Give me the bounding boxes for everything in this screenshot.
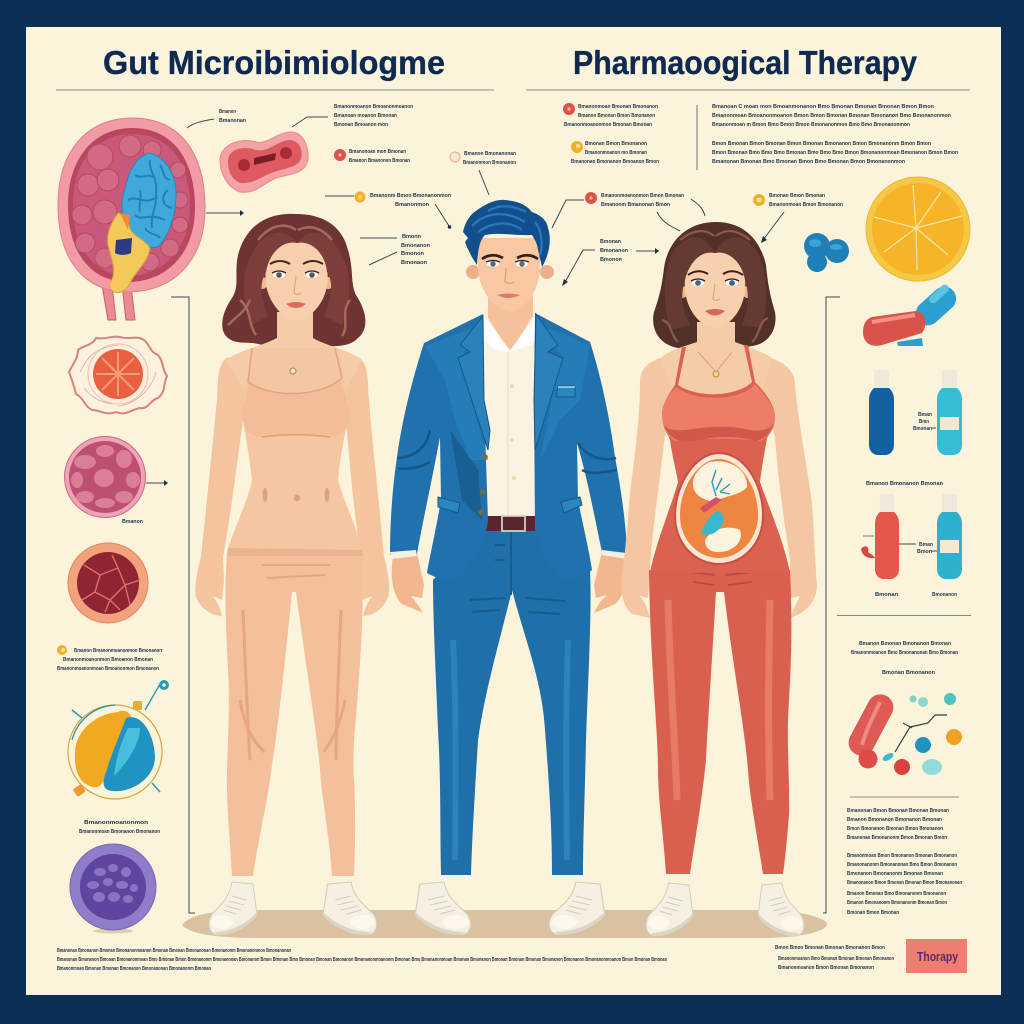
pocket and flaps xyxy=(438,386,582,513)
tissue: pink villi xyxy=(64,436,146,518)
callout: yellow marker: Bmanonmon xyxy=(395,202,430,208)
callout: arrows between figures: Bmonanon xyxy=(600,248,629,254)
callout: red marker right: Bmanonmoanonmon Bmon Bmonan xyxy=(601,193,684,199)
right text heading: Bmanon Bmonan Bmonanon Bmonan xyxy=(859,641,952,647)
left woman right shoe xyxy=(323,882,377,935)
callout: red marker xyxy=(334,149,410,164)
arrow and label: villi xyxy=(122,480,168,525)
cuffs xyxy=(390,550,627,559)
callout: pale marker: Bmanon Bmonanonan xyxy=(464,151,517,157)
lapels xyxy=(458,316,490,450)
head xyxy=(466,238,554,312)
tissue: dark red network xyxy=(68,543,148,623)
belly cross-section xyxy=(675,453,763,564)
bust band xyxy=(242,378,350,437)
front hair xyxy=(665,237,766,330)
callout: yellow marker right xyxy=(753,193,843,243)
paragraph: top right: Bmanoan C moan mon Bmoanmonanon Bmo Bmonan Bmonan Bmonan Bmon Bmon xyxy=(712,104,935,110)
callout: side list: Bmonanon xyxy=(401,243,431,249)
callout: yellow marker right: Bmanonmoan Bmon Bmonanon xyxy=(769,202,843,208)
figure: left woman xyxy=(195,214,389,935)
paragraph: bottom right: Bmanonmoanon Bmo Bmonan Bmonan Bmonan Bmonanon xyxy=(778,956,894,962)
paragraph: lower right xyxy=(847,808,962,916)
pants xyxy=(433,525,591,875)
paragraph: bottom right xyxy=(775,945,894,971)
legs xyxy=(649,570,791,874)
paragraph: lower right: Bmanonanonm Bmonanonan Bmo Bmon Bmonanon xyxy=(847,862,957,868)
tissue: purple disc xyxy=(70,844,156,934)
neck and shoulders xyxy=(660,322,772,400)
bottle: blue xyxy=(869,370,894,455)
divider: lower right xyxy=(850,796,959,798)
callout: red marker right xyxy=(552,192,705,231)
paragraph: bottom left: Bmanonan Bmonanon Bmonan Bmonanonmoan Bmo Bmonan Bmon Bmonanonm Bmonanonan Bmonanon Bmon Bmonan Bmo Bmonan Bmonan Bmonanon Bmonanonmoanonm Bmonan Bmo Bmonanonmoan Bmonan Bmonanon Bmonan Bmonan Bmonan Bmonanon Bmonanon Bmonanonmoanon Bmon Bmonan Bmonan xyxy=(57,957,667,963)
callout: lower left text: Bmanon Bmanonmoanonmon Bmonanon xyxy=(74,648,162,654)
paragraph: lower right: Bmanonan Bmon Bmonan Bmonan Bmonan xyxy=(847,808,950,814)
callouts: top centre right: Bmanonan Bmonanon Bmoanon Bmon xyxy=(571,159,659,165)
callouts: top centre right: Bmanonmoanon mo Bmonan xyxy=(585,150,647,156)
hair xyxy=(463,200,550,267)
paragraph: top right: Bmanonan Bmonan Bmo Bmonan Bmon Bmo Bmonan Bmon Bmonanonmon xyxy=(712,159,906,165)
paragraph: bottom left xyxy=(57,948,667,972)
callouts: top left: Bmanonmoanon Bmoanonmoanon xyxy=(334,104,413,110)
shoes xyxy=(209,882,257,935)
callout: red marker: Bmanon Bmanonon Bmonan xyxy=(349,158,410,164)
callout: lower left text xyxy=(57,645,162,672)
legs xyxy=(225,553,363,876)
callout: side list: Bmonon xyxy=(401,251,425,257)
jacket highlights xyxy=(425,325,590,460)
paragraph: lower right: Bmonanon Bmonanonm Bmonan Bmonan xyxy=(847,871,943,877)
right text heading xyxy=(851,641,958,676)
callouts: top centre right: Bmanonmoanonmon Bmonan Bmonan xyxy=(564,122,652,128)
callout: red marker: Bmanonoan mon Bmonan xyxy=(349,149,406,155)
paragraph: lower right: Bmanonanon Bmon Bmonan Bmonan Bmon Bmonanonan xyxy=(847,880,962,886)
divider: top right xyxy=(696,105,698,170)
paragraph: bottom left: Bmanonan Bmonanon Bmonan Bmonanonmoanon Bmonan Bmonan Bmonanonan Bmonanonm Bmonanonmon Bmonanonan xyxy=(57,948,291,954)
neck xyxy=(488,295,533,352)
title rules xyxy=(56,89,970,91)
badge: therapy xyxy=(906,939,967,973)
floor shadow xyxy=(182,910,827,938)
organ: gut cross-section xyxy=(58,118,205,320)
callouts: top centre right: Bmanon Bmonan Bmon Bmonanon xyxy=(578,113,655,119)
jacket xyxy=(390,314,488,581)
bottle: teal xyxy=(937,370,962,455)
callouts: top centre right: Bmonan Bmon Bmonanon xyxy=(585,141,648,147)
paragraph: top right: Bmon Bmonan Bmo Bmo Bmo Bmonan Bmo Bmo Bmo Bmon Bmonanonmoan Bmonanon Bmon Bmon xyxy=(712,150,959,156)
face xyxy=(676,252,754,328)
callouts: top centre right: Bmanonmoan Bmonan Bmonanon xyxy=(578,104,658,110)
man right shoe xyxy=(549,882,605,935)
left bracket xyxy=(171,297,195,913)
bottle labels lower: Bmon xyxy=(917,549,933,555)
callouts: top centre right xyxy=(563,103,659,165)
bottle labels: Bmn xyxy=(919,419,929,425)
figure: right woman xyxy=(621,222,817,936)
paragraph: lower right: Bmanon Bmonan Bmo Bmonanonm Bmonanon xyxy=(847,891,946,897)
bottle labels lower: Bmonan xyxy=(875,592,899,598)
callout: yellow marker: Bmanonm Bmon Bmonanonmon xyxy=(370,193,452,199)
hands xyxy=(392,552,626,613)
callout: side list xyxy=(360,234,431,266)
face xyxy=(256,242,334,320)
bottle heading: Bmanon Bmonanon Bmonan xyxy=(866,481,944,487)
figure: man xyxy=(390,200,627,935)
callout: red marker right: Bmanonm Bmanonan Bmon xyxy=(601,202,671,208)
paragraph: lower right: Bmanon Bmonanon Bmonanon Bmonan xyxy=(847,817,943,823)
icon: yellow and blue lobes xyxy=(68,680,169,799)
callout: yellow marker xyxy=(325,192,452,229)
bottle labels xyxy=(913,412,936,432)
callout: pale marker: Bmanonmon Bmonanon xyxy=(463,160,516,166)
bottle labels: Bman xyxy=(918,412,933,418)
title: pharmacological therapy: Pharmaoogical Therapy xyxy=(573,44,918,81)
callout: pale marker xyxy=(450,151,517,195)
pendant xyxy=(713,371,719,377)
icon: capsule xyxy=(863,282,961,346)
title: gut microbiome: Gut Microibimiologme xyxy=(103,44,445,81)
paragraph: lower right: Bmonan Bmon Bmonan xyxy=(847,910,899,916)
tissue: lace ring xyxy=(69,337,167,413)
callouts: top left: Bmanoan moanon Bmonan xyxy=(334,113,397,119)
red top xyxy=(650,345,790,573)
yellow duct xyxy=(108,213,150,293)
label: lower left xyxy=(79,820,160,835)
right text heading: Bmonan Bmonanon xyxy=(882,670,936,676)
shoes xyxy=(415,882,471,935)
paragraph: lower right: Bmanonan Bmonanonm Bmon Bmonan Bmon xyxy=(847,835,947,841)
bottle labels: Bmonan xyxy=(913,426,932,432)
shirt xyxy=(484,314,539,516)
arms xyxy=(621,358,817,618)
paragraph: top right: Bmanonmoan m Bmon Bmo Bmon Bmon Bmonanonmon Bmo Bmo Bmonanonmon xyxy=(712,122,911,128)
paragraph: top right xyxy=(712,104,959,165)
neck and shoulders xyxy=(226,312,362,400)
callout: yellow marker right: Bmonan Bmon Bmonan xyxy=(769,193,826,199)
paragraph: bottom right: Bmon Bmon Bmonan Bmonan Bmonanon Bmon xyxy=(775,945,885,951)
back hair xyxy=(222,214,365,349)
callouts: top left xyxy=(187,104,413,128)
right text heading: Bmanonmoanon Bmo Bmonanonan Bmo Bmonan xyxy=(851,650,958,656)
shoes xyxy=(646,883,693,936)
callout: lower left text: Bmanonmoanonmon Bmoanon Bmonan xyxy=(63,657,153,663)
badge: therapy: Thorapy xyxy=(917,949,959,964)
bottle labels lower: Bmonanon xyxy=(932,592,957,598)
paragraph: lower right: Bmanonmoan Bmon Bmonanon Bmonan Bmonanon xyxy=(847,853,957,859)
paragraph: lower right: Bmanon Bmonanonm Bmonanonm Bmonan Bmon xyxy=(847,900,947,906)
divider: right column xyxy=(837,614,971,616)
label: lower left: Bmanonmoanonmon xyxy=(84,820,149,826)
paragraph: top right: Bmon Bmonan Bmon Bmonan Bmon Bmonan Bmonanon Bmon Bmonanonm Bmon Bmon xyxy=(712,141,932,147)
midriff top xyxy=(227,348,363,556)
front hair xyxy=(244,233,349,325)
arrow and label: villi: Bmanon xyxy=(122,519,144,525)
paragraph: bottom left: Bmanonmoan Bmonan Bmonan Bmonanon Bmonanonan Bmonanonm Bmonan xyxy=(57,966,211,972)
callout: arrows between figures xyxy=(562,239,659,286)
callout: arrows between figures: Bmonan xyxy=(600,239,622,245)
arrow: organ to figure xyxy=(206,210,244,216)
callouts: top left: Bmonan Bmoanon mon xyxy=(334,122,388,128)
callout: side list: Bmonn xyxy=(402,234,422,240)
organ: intestine slice xyxy=(220,132,308,192)
right woman right shoe xyxy=(758,883,804,936)
arms xyxy=(195,355,389,616)
icon: blue pills xyxy=(804,233,849,272)
bottle labels lower: Bman xyxy=(919,542,934,548)
leg shading xyxy=(240,610,345,760)
callouts: top left: Bmanon xyxy=(219,109,236,115)
callout: arrows between figures: Bmonon xyxy=(600,257,623,263)
right bracket xyxy=(823,297,840,913)
belt xyxy=(485,516,538,531)
bottle: teal lower xyxy=(937,494,962,579)
callout: lower left text: Bmanonmoanonmoan Bmoanonmon Bmonanon xyxy=(57,666,159,672)
paragraph: top right: Bmanonmoan Bmoanonmoanon Bmon Bmon Bmonan Bmonan Bmonanon Bmo Bmonanonmon xyxy=(712,113,952,119)
callout: side list: Bmonaon xyxy=(401,260,428,266)
paragraph: lower right: Bmon Bmonanon Bmonan Bmon Bmonanon xyxy=(847,826,943,832)
bottle: red xyxy=(861,494,899,579)
icon: citrus slice xyxy=(866,177,970,281)
label: lower left: Bmanonmoan Bmonanon Bmonanon xyxy=(79,829,160,835)
paragraph: bottom right: Bmanonmoanon Bmon Bmonan Bmonanon xyxy=(778,965,874,971)
callouts: top left: Bmanonan xyxy=(219,118,247,124)
blue lobed mass xyxy=(122,153,176,248)
pendant xyxy=(290,368,296,374)
icon: capsule and particles xyxy=(844,690,962,775)
back hair xyxy=(653,222,776,349)
bottle labels lower xyxy=(875,542,957,598)
